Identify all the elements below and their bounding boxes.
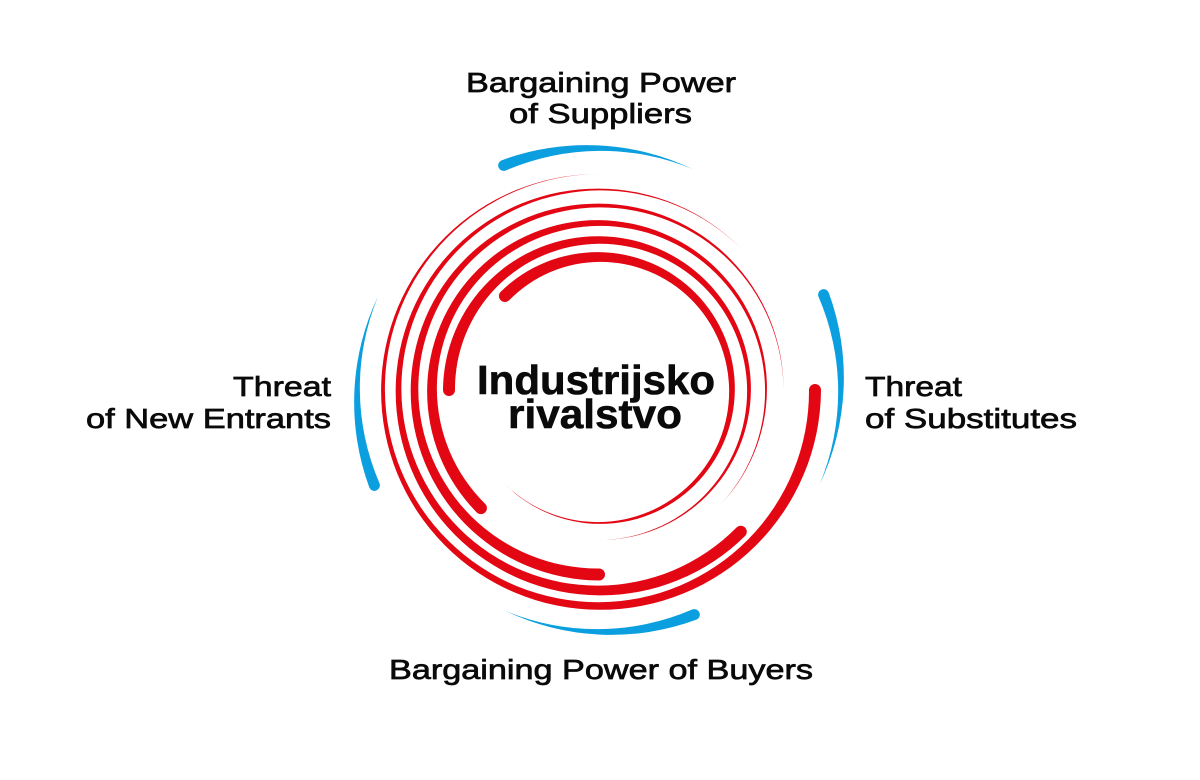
- label: suppliers: Bargaining Power: [466, 67, 736, 98]
- center title: Industrijsko: [477, 357, 715, 403]
- red arc 3: [356, 150, 837, 630]
- red arc 4: [411, 204, 784, 580]
- red arc 1 (innermost): [407, 195, 791, 579]
- blue arc: substitutes: [750, 287, 896, 484]
- label: substitutes: of Substitutes: [865, 403, 1077, 434]
- label: suppliers: [466, 67, 736, 129]
- label: buyers: Bargaining Power of Buyers: [389, 654, 813, 685]
- center title: rivalstvo: [508, 391, 682, 437]
- label: new entrants: of New Entrants: [86, 403, 331, 434]
- label: substitutes: Threat: [865, 371, 962, 402]
- blue arc: buyers: [505, 541, 702, 687]
- center title: [477, 357, 715, 437]
- label: new entrants: [86, 371, 331, 434]
- blue arc: new entrants: [302, 296, 448, 493]
- blue arc: suppliers: [496, 93, 693, 239]
- red arc 5: [311, 105, 887, 680]
- red arc 6 (outermost): [381, 174, 821, 610]
- red arc 2: [443, 236, 751, 540]
- diagram: rivalry spiral: [302, 93, 896, 687]
- label: new entrants: Threat: [233, 371, 331, 402]
- label: substitutes: [865, 371, 1077, 434]
- label: suppliers: of Suppliers: [509, 98, 692, 129]
